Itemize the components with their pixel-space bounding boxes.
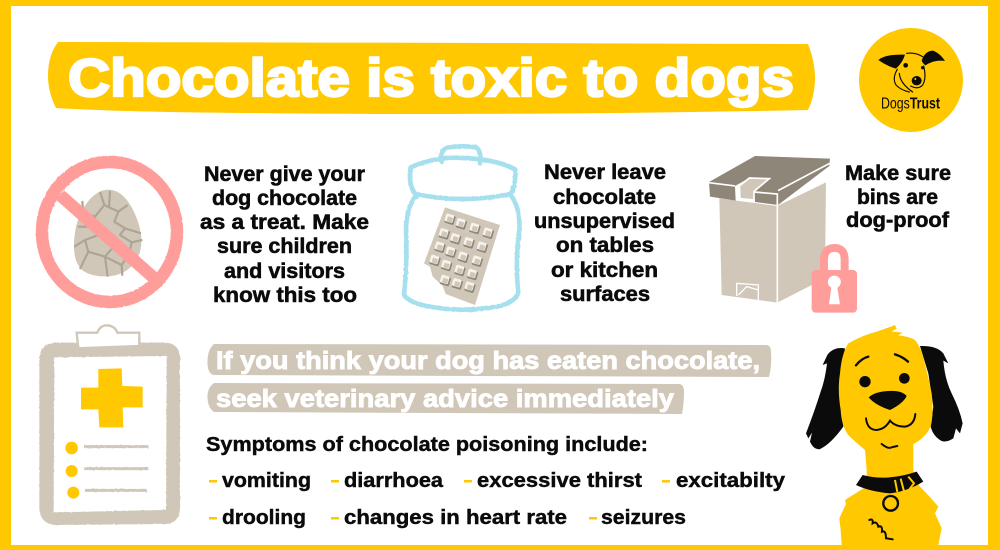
bin pedal — [737, 283, 758, 300]
bin body — [719, 182, 826, 303]
jar outline — [404, 146, 519, 310]
text: bins dog-proof: dog-proof — [846, 209, 950, 232]
text: never give treats: know this too — [213, 284, 357, 307]
symptoms list: excessive thirst — [477, 469, 642, 492]
dog collar — [856, 472, 923, 493]
title: Chocolate is toxic to dogs — [68, 49, 794, 108]
text: never leave unsupervised: chocolate — [553, 186, 656, 209]
clipboard frame — [39, 343, 180, 525]
padlock — [812, 248, 857, 313]
symptoms heading: Symptoms of chocolate poisoning include: — [206, 433, 648, 456]
dog face — [856, 354, 915, 539]
symptoms list: diarrhoea — [344, 469, 444, 492]
text: never leave unsupervised: surfaces — [560, 283, 650, 306]
egg — [74, 190, 142, 277]
icon: clipboard — [39, 325, 180, 525]
medical cross — [81, 368, 143, 427]
text: never give treats: sure children — [217, 235, 352, 258]
dog body — [839, 325, 942, 545]
text: bins dog-proof — [845, 162, 951, 232]
logo: Dogs Trust — [859, 28, 963, 132]
symptoms list: excitabilty — [676, 469, 786, 492]
symptoms list: seizures — [601, 506, 686, 529]
text: never leave unsupervised: Never leave — [544, 161, 666, 184]
advice banner — [207, 344, 771, 414]
chocolate bar — [424, 207, 500, 305]
logo wordmark: DogsTrust — [881, 96, 940, 112]
text: never give treats: and visitors — [224, 260, 345, 283]
text: never give treats: dog chocolate — [212, 187, 357, 210]
text: never leave unsupervised: unsupervised — [534, 210, 675, 233]
text: bins dog-proof: bins are — [857, 186, 938, 209]
bin lid — [709, 156, 830, 205]
text: never leave unsupervised — [534, 161, 675, 306]
icon: jar with chocolate bar — [404, 146, 519, 310]
advice text: If you think your dog has eaten chocolate, — [216, 347, 760, 375]
bin latch — [739, 178, 769, 200]
advice banner: seek veterinary advice immediately — [216, 385, 674, 413]
text: never give treats: as a treat. Make — [200, 211, 369, 234]
clipboard clip — [77, 325, 139, 348]
icon: no chocolate egg — [42, 162, 177, 302]
symptoms list: drooling — [222, 506, 306, 529]
text: bins dog-proof: Make sure — [845, 162, 951, 185]
text: never give treats: Never give your — [204, 163, 365, 186]
symptoms list: changes in heart rate — [344, 506, 567, 529]
checklist — [65, 442, 148, 499]
icon: bin with padlock — [709, 156, 857, 313]
logo dog — [878, 51, 945, 92]
dog ears — [806, 346, 963, 449]
title banner — [48, 42, 815, 114]
text: never leave unsupervised: or kitchen — [551, 259, 658, 282]
text: never leave unsupervised: on tables — [556, 234, 654, 257]
text: never give treats — [200, 163, 369, 307]
symptoms list: vomiting — [222, 469, 311, 492]
symptoms list — [209, 469, 786, 529]
prohibition sign — [42, 162, 177, 302]
illustration: yellow dog — [806, 325, 963, 545]
